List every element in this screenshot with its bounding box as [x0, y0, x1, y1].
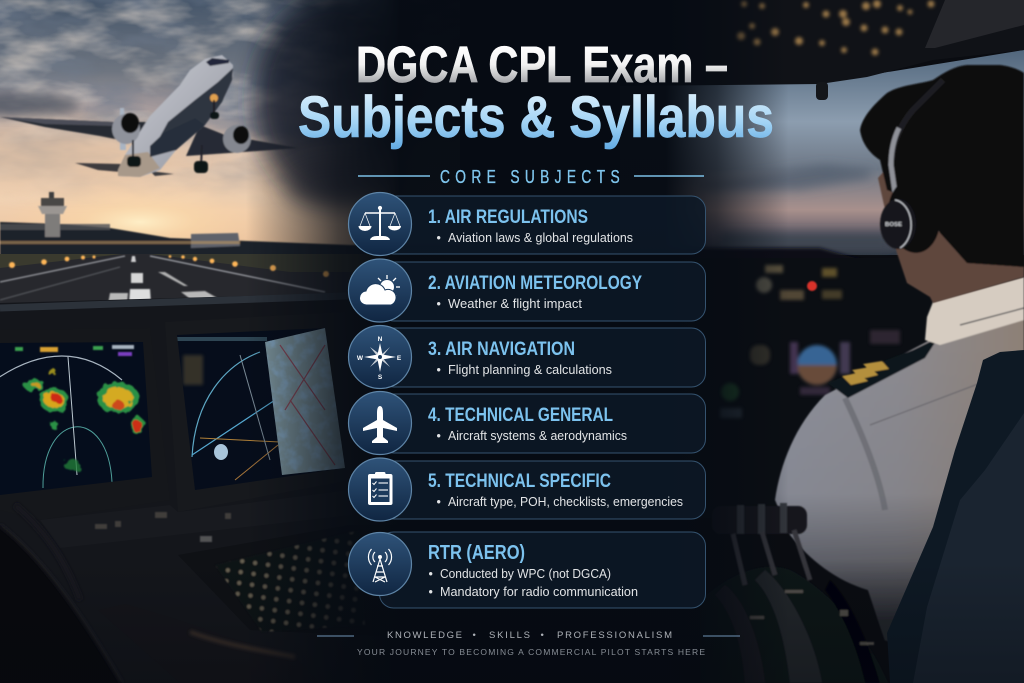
chart: weather radar display	[0, 342, 152, 495]
scene: cockpit top frame	[0, 290, 460, 683]
title: DGCA CPL Exam –	[356, 36, 728, 93]
card: technical specific: 5. TECHNICAL SPECIFIC	[428, 470, 611, 492]
scene: airport sky at sunset	[0, 0, 388, 254]
footer: tagline: YOUR JOURNEY TO BECOMING A COMMERCIAL PILOT STARTS HERE	[357, 647, 705, 657]
card: aviation meteorology	[348, 259, 706, 322]
card: air navigation: Flight planning & calculations	[448, 363, 612, 377]
scene: airport terminal and control tower	[0, 192, 460, 258]
footer: tagline: PROFESSIONALISM	[557, 630, 672, 641]
chart: navigation map display	[177, 325, 350, 490]
card: aviation meteorology: 2. AVIATION METEOROLOGY	[428, 272, 642, 294]
scene: thrust levers	[700, 503, 888, 683]
card: RTR aero	[348, 532, 706, 608]
card: air navigation	[348, 326, 706, 388]
footer: tagline: KNOWLEDGE	[387, 630, 462, 641]
scene: pilot head with headset	[860, 65, 1024, 303]
icon: sun and cloud	[359, 275, 400, 305]
card: technical general: •	[436, 429, 441, 443]
scene: pilot head with headset: BOSE	[885, 222, 903, 228]
scene: airplane taking off	[0, 55, 298, 177]
bottom shading	[0, 560, 1024, 683]
scene: runway with lights	[0, 254, 460, 310]
icon: radio tower	[368, 549, 392, 582]
scene: left bezels	[0, 312, 352, 548]
icon: compass rose: N	[378, 336, 383, 343]
card: air regulations: •	[436, 231, 441, 245]
card: air regulations: 1. AIR REGULATIONS	[428, 206, 588, 228]
icon: scales of justice	[358, 206, 401, 240]
card: air navigation: 3. AIR NAVIGATION	[428, 338, 575, 360]
card: air regulations: Aviation laws & global regulations	[448, 231, 633, 245]
card: RTR aero: Mandatory for radio communication	[440, 585, 638, 599]
icon: compass rose: E	[397, 355, 402, 362]
card: RTR aero: RTR (AERO)	[428, 541, 525, 564]
card: aviation meteorology: Weather & flight impact	[448, 297, 583, 311]
card: technical general: Aircraft systems & aerodynamics	[448, 429, 627, 443]
title	[298, 36, 774, 150]
section heading: core subjects: CORE SUBJECTS	[440, 167, 625, 187]
card: technical general	[348, 392, 706, 454]
icon: compass rose	[357, 336, 402, 381]
card: technical specific: •	[436, 495, 441, 509]
icon: compass rose: S	[378, 374, 383, 381]
card: technical specific	[348, 458, 706, 521]
scene: windshield sky	[620, 50, 1024, 320]
card: technical specific: Aircraft type, POH, checklists, emergencies	[448, 495, 683, 509]
icon: airplane	[363, 406, 397, 443]
title: Subjects & Syllabus	[298, 85, 774, 150]
footer: tagline: •	[472, 630, 476, 641]
icon: compass rose: W	[357, 355, 364, 362]
footer: tagline: SKILLS	[489, 630, 530, 641]
card: air regulations	[348, 192, 706, 256]
icon: clipboard checklist	[368, 472, 392, 505]
scene: foreground seat and armrest	[0, 505, 320, 683]
card: RTR aero: •	[428, 567, 433, 581]
card: RTR aero: •	[428, 585, 433, 599]
scene: pilot seat	[887, 350, 1024, 683]
card: aviation meteorology: •	[436, 297, 441, 311]
scene: overhead panel with lights	[620, 0, 1024, 100]
card: technical general: 4. TECHNICAL GENERAL	[428, 404, 613, 426]
scene: center console with buttons	[178, 525, 460, 640]
footer: tagline	[317, 630, 740, 657]
footer: tagline: •	[540, 630, 544, 641]
scene: pilot shirt with epaulette	[775, 277, 1024, 683]
scene: right instrument panel	[620, 258, 940, 518]
card: air navigation: •	[436, 363, 441, 377]
card: RTR aero: Conducted by WPC (not DGCA)	[440, 567, 611, 581]
